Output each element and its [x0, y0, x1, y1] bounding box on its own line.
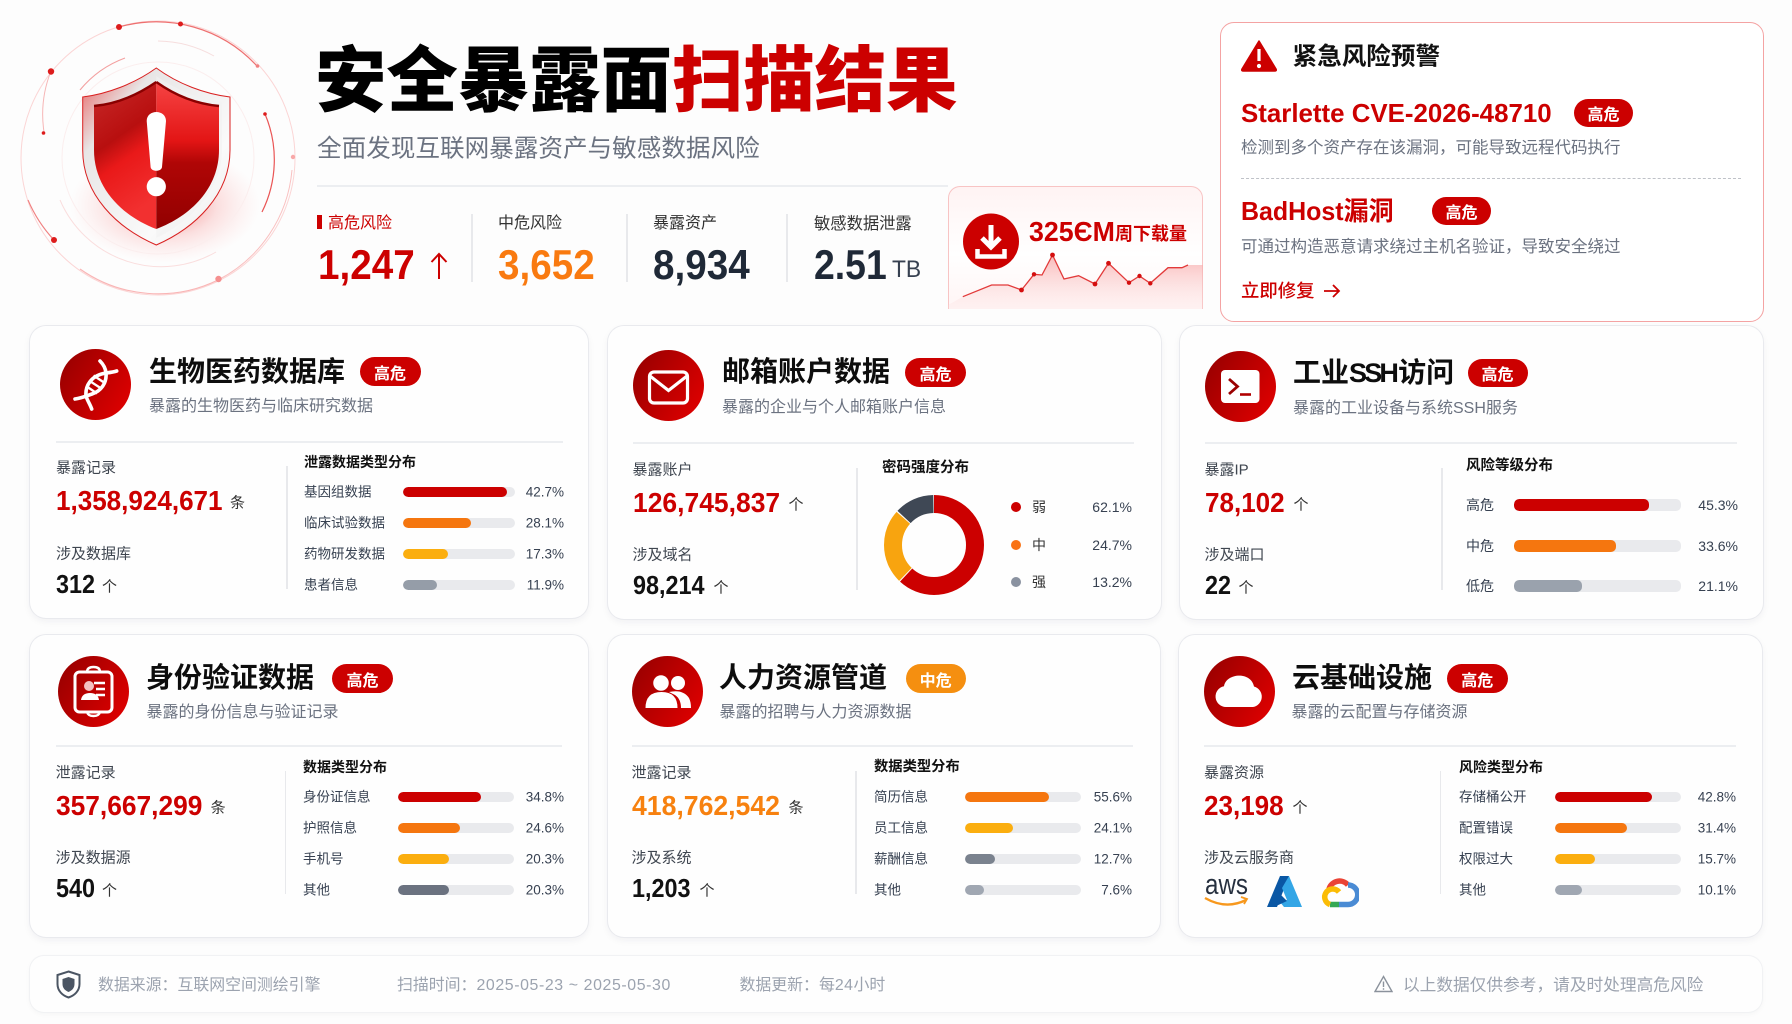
- metric: leaked records: 条: [788, 799, 804, 816]
- metric: exposed resources: 个: [1292, 799, 1308, 816]
- bar chart: leaked data types: 42.7%: [526, 484, 564, 499]
- panel: 工业SSH访问: [1180, 326, 1763, 619]
- badge: high: 高危: [346, 672, 378, 690]
- bar chart: leaked data types: 泄露数据类型分布: [304, 454, 416, 470]
- metric: systems: 1,203: [632, 873, 690, 903]
- card description: 暴露的工业设备与系统SSH服务: [1293, 400, 1518, 417]
- bar chart: data types: 数据类型分布: [303, 759, 387, 775]
- metric: cloud providers: [1204, 850, 1359, 908]
- metric: systems: 涉及系统: [632, 850, 692, 866]
- bar chart: data types: 55.6%: [1094, 789, 1132, 804]
- stat: 中危风险: [498, 214, 595, 288]
- donut chart: password strength: 密码强度分布: [882, 460, 969, 476]
- icon: users: [632, 656, 703, 727]
- bar chart: risk types: 其他: [1459, 882, 1486, 897]
- link: fix now: 立即修复: [1241, 280, 1315, 301]
- metric: exposed records: 条: [230, 494, 245, 512]
- metric: ports: 涉及端口: [1204, 546, 1265, 564]
- badge: high: 高危: [374, 366, 406, 382]
- metric: data sources: 540: [56, 873, 95, 903]
- metric: exposed IPs: 个: [1294, 496, 1309, 514]
- bar chart: risk types: 配置错误: [1459, 820, 1513, 835]
- stat: 敏感数据泄露: 敏感数据泄露: [814, 215, 912, 233]
- metric: exposed resources: 23,198: [1204, 790, 1284, 821]
- metric: exposed accounts: 126,745,837: [632, 487, 780, 518]
- stat: 暴露资产: 8,934: [653, 241, 750, 288]
- panel: urgent risk alert: [1220, 22, 1764, 322]
- donut chart: password strength: 中: [1032, 537, 1046, 553]
- bar chart: risk types: 15.7%: [1698, 851, 1736, 866]
- footer bar: [30, 956, 1762, 1012]
- bar chart: risk levels: 低危: [1466, 578, 1494, 594]
- bar chart: data types: 护照信息: [303, 820, 357, 835]
- logo: google cloud: [1322, 878, 1359, 908]
- stat: 高危风险: [317, 214, 448, 288]
- metric: domains: 个: [714, 580, 729, 596]
- badge: high: 高危: [1461, 672, 1493, 690]
- metric: leaked records: 条: [211, 799, 226, 816]
- bar chart: risk types: 10.1%: [1698, 882, 1736, 897]
- bar chart: risk levels: 风险等级分布: [1466, 458, 1553, 474]
- bar chart: risk types: 31.4%: [1698, 820, 1736, 835]
- bar chart: data types: 20.3%: [526, 851, 564, 866]
- metric: databases: 个: [102, 578, 117, 596]
- stat: 中危风险: 3,652: [498, 241, 595, 288]
- bar chart: data types: 其他: [303, 882, 330, 897]
- metric: exposed resources: [1204, 764, 1308, 821]
- metric: domains: [632, 546, 729, 600]
- metric: domains: 涉及域名: [632, 546, 693, 564]
- title: 安全暴露面扫描结果: [315, 41, 958, 121]
- data source: 数据来源：互联网空间测绘引擎: [98, 977, 320, 994]
- metric: leaked records: 泄露记录: [56, 764, 116, 781]
- donut chart: password strength: [882, 459, 1132, 595]
- alert item: BadHost: 可通过构造恶意请求绕过主机名验证，导致安全绕过: [1241, 238, 1620, 256]
- metric: data sources: 个: [102, 882, 117, 900]
- bar chart: data types: 20.3%: [526, 882, 564, 897]
- card title: 工业SSH访问: [1293, 357, 1454, 388]
- metric: leaked records: 泄露记录: [632, 764, 692, 781]
- metric: cloud providers: 涉及云服务商: [1204, 850, 1294, 866]
- alert item: Starlette: 高危: [1587, 107, 1620, 124]
- donut chart: password strength: 弱: [1032, 499, 1046, 515]
- metric: systems: 个: [700, 882, 715, 900]
- bar chart: data types: [874, 758, 1132, 897]
- alert heading: 紧急风险预警: [1292, 44, 1440, 71]
- stat: 中危风险: 中危风险: [498, 215, 562, 232]
- bar chart: leaked data types: [304, 454, 564, 592]
- icon: warning triangle: [1241, 40, 1277, 72]
- card description: 暴露的企业与个人邮箱账户信息: [722, 399, 946, 416]
- bar chart: data types: 24.1%: [1094, 820, 1132, 835]
- bar chart: risk levels: [1466, 457, 1738, 594]
- metric: ports: 22: [1204, 570, 1231, 600]
- icon: download: [963, 214, 1019, 270]
- metric: exposed accounts: [632, 462, 804, 518]
- bar chart: data types: [303, 759, 564, 897]
- subtitle: 全面发现互联网暴露资产与敏感数据风险: [317, 136, 760, 163]
- card description: 暴露的云配置与存储资源: [1292, 704, 1468, 721]
- bar chart: data types: 12.7%: [1094, 851, 1132, 866]
- bar chart: data types: 手机号: [303, 851, 344, 866]
- metric: exposed records: 暴露记录: [56, 460, 116, 476]
- metric: domains: 98,214: [632, 570, 704, 600]
- alert item: BadHost: BadHost漏洞: [1241, 196, 1394, 226]
- card description: 暴露的招聘与人力资源数据: [720, 704, 912, 721]
- badge: high: [332, 664, 393, 693]
- bar chart: risk types: [1459, 759, 1736, 897]
- panel: 身份验证数据: [30, 635, 588, 937]
- metric: exposed records: [56, 460, 245, 516]
- badge: high: [1468, 359, 1528, 387]
- bar chart: leaked data types: 11.9%: [527, 577, 564, 592]
- metric: leaked records: 418,762,542: [632, 790, 779, 821]
- metric: exposed resources: 暴露资源: [1204, 764, 1264, 781]
- bar chart: leaked data types: 患者信息: [304, 577, 358, 592]
- panel: 邮箱账户数据: [608, 326, 1161, 619]
- metric: data sources: [56, 850, 131, 903]
- stat: 高危风险: 高危风险: [328, 215, 392, 232]
- stat: 高危风险: 1,247: [318, 241, 415, 288]
- card description: 暴露的生物医药与临床研究数据: [149, 398, 373, 415]
- disclaimer: 以上数据仅供参考，请及时处理高危风险: [1403, 975, 1703, 994]
- panel: weekly downloads: [948, 186, 1203, 309]
- badge: medium: 中危: [920, 672, 952, 690]
- bar chart: data types: 24.6%: [526, 820, 564, 835]
- bar chart: data types: 数据类型分布: [874, 759, 960, 775]
- donut chart: password strength: 13.2%: [1092, 574, 1132, 590]
- stat: 敏感数据泄露: TB: [892, 256, 921, 283]
- metric: systems: [632, 850, 715, 903]
- alert item: Starlette: [1241, 98, 1633, 157]
- bar chart: data types: 薪酬信息: [874, 851, 928, 866]
- stat: 敏感数据泄露: 2.51: [814, 241, 887, 288]
- metric: databases: 312: [56, 569, 95, 599]
- alert item: Starlette: 检测到多个资产存在该漏洞，可能导致远程代码执行: [1241, 139, 1620, 157]
- stat: 暴露资产: [653, 214, 750, 288]
- donut chart: password strength: 62.1%: [1092, 499, 1132, 515]
- download figure: 325ЄM: [1029, 216, 1115, 247]
- icon: mail: [633, 350, 704, 421]
- metric: exposed accounts: 个: [788, 496, 804, 514]
- bar chart: risk levels: 45.3%: [1698, 497, 1738, 513]
- alert item: BadHost: 高危: [1445, 205, 1478, 222]
- scan time: 扫描时间：2025-05-23 ~ 2025-05-30: [397, 977, 671, 994]
- metric: ports: 个: [1238, 580, 1254, 596]
- bar chart: data types: 员工信息: [874, 820, 928, 835]
- sparkline: [956, 252, 1203, 302]
- card title: 云基础设施: [1292, 662, 1432, 693]
- metric: leaked records: [632, 764, 804, 821]
- bar chart: leaked data types: 28.1%: [526, 515, 564, 530]
- metric: databases: [56, 546, 131, 599]
- bar chart: risk types: 风险类型分布: [1459, 759, 1543, 775]
- bar chart: risk levels: 33.6%: [1698, 538, 1738, 554]
- metric: exposed IPs: 78,102: [1204, 487, 1284, 518]
- bar chart: risk levels: 中危: [1466, 538, 1494, 554]
- bar chart: leaked data types: 基因组数据: [304, 484, 372, 499]
- badge: medium: [906, 664, 966, 693]
- stat: 暴露资产: 暴露资产: [653, 215, 717, 232]
- card title: 人力资源管道: [719, 662, 887, 693]
- bar chart: risk types: 权限过大: [1459, 851, 1513, 866]
- badge: high: 高危: [1481, 367, 1514, 384]
- metric: exposed accounts: 暴露账户: [632, 462, 693, 478]
- metric: leaked records: 357,667,299: [56, 790, 202, 821]
- donut chart: password strength: 24.7%: [1092, 537, 1132, 553]
- icon: warning outline: [1374, 975, 1393, 993]
- metric: leaked records: [56, 764, 226, 821]
- card title: 生物医药数据库: [149, 356, 345, 387]
- bar chart: risk types: 存储桶公开: [1459, 789, 1526, 804]
- bar chart: leaked data types: 药物研发数据: [304, 546, 385, 561]
- bar chart: data types: 34.8%: [526, 789, 564, 804]
- metric: exposed IPs: 暴露IP: [1204, 462, 1249, 478]
- metric: data sources: 涉及数据源: [56, 850, 131, 866]
- badge: high: 高危: [919, 366, 952, 384]
- card description: 暴露的身份信息与验证记录: [146, 704, 339, 721]
- card title: 邮箱账户数据: [722, 356, 890, 387]
- icon: terminal: [1205, 351, 1276, 422]
- icon: shield: [56, 970, 81, 999]
- stat: 敏感数据泄露: [814, 214, 921, 288]
- metric: exposed records: 1,358,924,671: [56, 485, 223, 516]
- icon: id clipboard: [58, 656, 129, 727]
- panel: 人力资源管道: [608, 635, 1160, 937]
- logo: azure: [1267, 876, 1302, 907]
- badge: high: [360, 357, 420, 386]
- icon: cloud: [1204, 656, 1275, 727]
- metric: exposed IPs: [1204, 462, 1309, 518]
- card title: 身份验证数据: [146, 662, 314, 693]
- icon: dna: [60, 349, 131, 420]
- alert item: BadHost: [1241, 196, 1620, 256]
- donut chart: password strength: 强: [1032, 574, 1046, 590]
- update frequency: 数据更新：每24小时: [740, 977, 885, 994]
- alert item: Starlette: Starlette CVE-2026-48710: [1241, 98, 1552, 128]
- bar chart: risk types: 42.8%: [1698, 789, 1736, 804]
- metric: ports: [1204, 546, 1265, 600]
- badge: high: [1447, 664, 1508, 693]
- bar chart: data types: 其他: [874, 882, 901, 897]
- bar chart: data types: 简历信息: [874, 789, 928, 804]
- bar chart: data types: 7.6%: [1101, 882, 1132, 897]
- bar chart: data types: 身份证信息: [303, 789, 370, 804]
- bar chart: leaked data types: 17.3%: [526, 546, 564, 561]
- metric: databases: 涉及数据库: [56, 546, 131, 562]
- bar chart: risk levels: 高危: [1466, 497, 1494, 513]
- icon: alert shield with radar rings: [20, 20, 296, 296]
- download caption: 周下载量: [1115, 224, 1187, 244]
- panel: 生物医药数据库: [30, 326, 588, 618]
- panel: 云基础设施: [1179, 635, 1762, 937]
- badge: high: [905, 358, 966, 387]
- bar chart: leaked data types: 临床试验数据: [304, 515, 385, 530]
- bar chart: risk levels: 21.1%: [1698, 578, 1738, 594]
